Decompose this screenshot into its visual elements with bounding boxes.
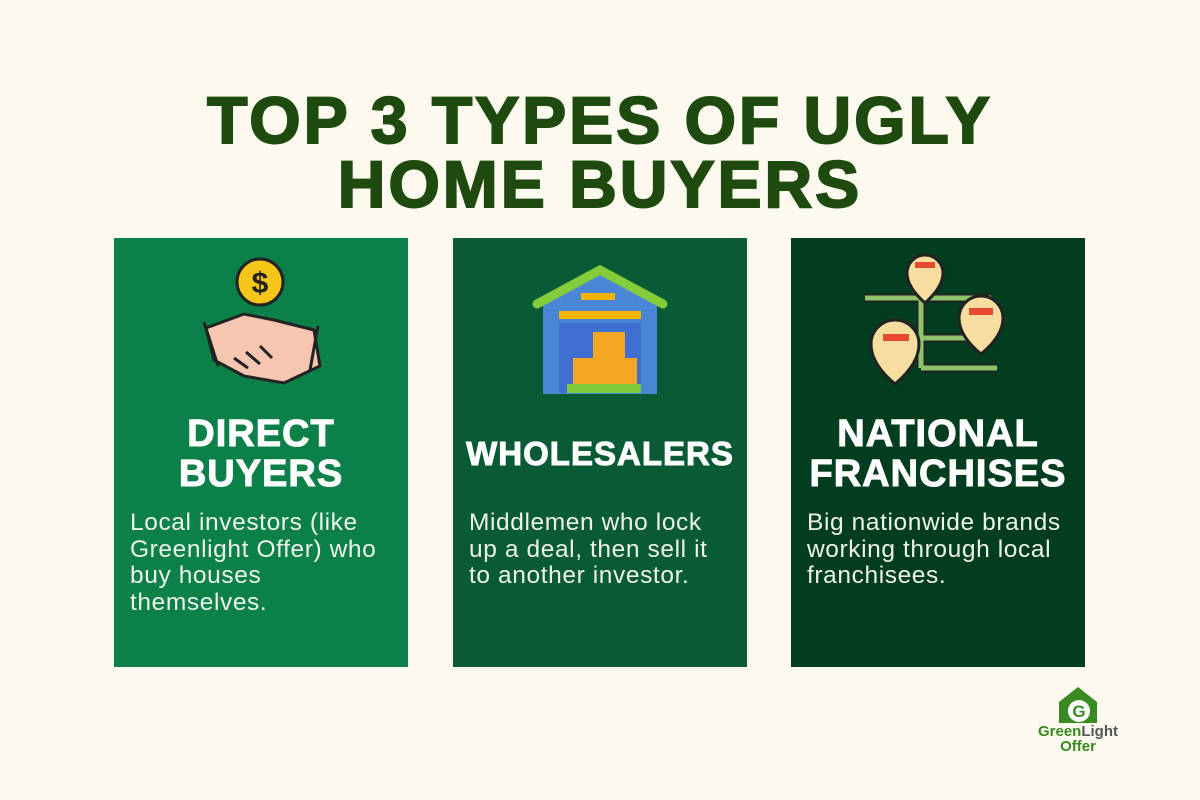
heading: BUYERS (179, 453, 343, 495)
icon: warehouse (532, 265, 668, 394)
logo: G (1072, 702, 1086, 721)
title: TOP 3 TYPES OF UGLY (207, 83, 993, 157)
logo: GreenLight (1038, 723, 1118, 740)
heading: DIRECT (187, 413, 335, 455)
body text: Middlemen who lock (469, 509, 702, 536)
title (206, 83, 993, 221)
body text (807, 509, 1061, 589)
body text (130, 509, 376, 616)
body text: working through local (807, 536, 1051, 562)
heading: WHOLESALERS (466, 435, 734, 472)
body text: themselves. (130, 588, 267, 616)
body text: up a deal, then sell it (469, 536, 708, 562)
panel: wholesalers (453, 238, 747, 667)
heading (179, 413, 343, 495)
title: HOME BUYERS (338, 147, 862, 221)
logo: Offer (1060, 738, 1096, 755)
body text: Local investors (like (130, 509, 358, 536)
logo (1038, 687, 1118, 755)
icon: map pins (865, 254, 1004, 386)
body text: buy houses (130, 562, 261, 589)
body text: Big nationwide brands (807, 509, 1061, 536)
body text: franchisees. (807, 562, 946, 589)
panel: direct buyers (114, 238, 408, 667)
icon: handshake with coin (202, 258, 322, 384)
body text (469, 509, 708, 589)
heading: NATIONAL (837, 413, 1039, 455)
heading: FRANCHISES (809, 453, 1067, 495)
body text: to another investor. (469, 562, 689, 589)
panel: national franchises (791, 238, 1085, 667)
heading (809, 413, 1067, 495)
icon: handshake with coin: $ (252, 267, 269, 300)
body text: Greenlight Offer) who (130, 536, 376, 562)
